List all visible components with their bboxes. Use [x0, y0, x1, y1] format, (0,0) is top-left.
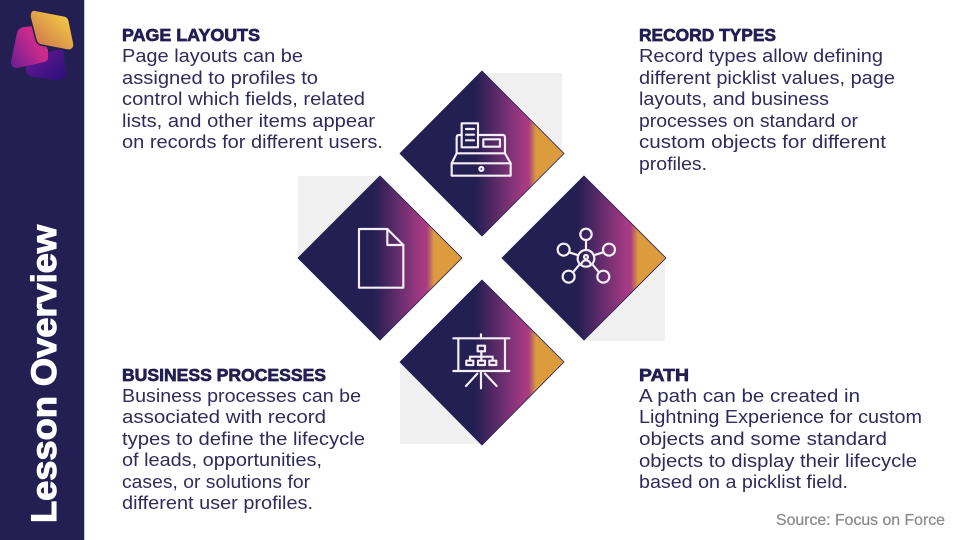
source note: Source: Focus on Force: [776, 512, 945, 529]
text block: path: objects to display their lifecycle: [639, 451, 917, 471]
text block: page layouts: on records for different users.: [122, 132, 383, 152]
text block: record types: Record types allow defining: [639, 46, 883, 66]
text block: record types: profiles.: [639, 154, 707, 174]
sidebar: [0, 0, 85, 540]
text block: page layouts: Page layouts can be: [122, 46, 303, 66]
text block: business processes: [122, 365, 365, 513]
text block: record types: custom objects for different: [639, 132, 886, 152]
text block: path: A path can be created in: [639, 386, 860, 406]
text block: business processes: different user profiles.: [122, 493, 313, 513]
diamond: page layouts: [400, 71, 564, 236]
text block: business processes: of leads, opportunities,: [122, 450, 322, 470]
diamond: document: [298, 176, 462, 340]
icon: presentation board: [453, 334, 509, 388]
text block: business processes: BUSINESS PROCESSES: [122, 365, 326, 385]
icon: cash register: [452, 123, 511, 176]
logo: [12, 10, 74, 79]
diamond: presentation: [400, 280, 564, 445]
sidebar title: Lesson Overview: [25, 224, 64, 523]
text block: page layouts: assigned to profiles to: [122, 68, 318, 88]
text block: business processes: associated with record: [122, 407, 326, 427]
text block: record types: [639, 25, 895, 174]
icon: document: [359, 229, 403, 288]
text block: page layouts: PAGE LAYOUTS: [122, 25, 260, 45]
text block: business processes: types to define the lifecycle: [122, 429, 365, 449]
gray backing squares: [298, 73, 665, 444]
text block: path: [639, 365, 922, 492]
text block: page layouts: lists, and other items appear: [122, 111, 375, 131]
text block: business processes: Business processes can be: [122, 386, 361, 406]
text block: path: objects and some standard: [639, 429, 887, 449]
text block: path: PATH: [639, 365, 689, 385]
text block: record types: layouts, and business: [639, 89, 829, 109]
text block: path: based on a picklist field.: [639, 472, 848, 492]
text block: record types: processes on standard or: [639, 111, 858, 131]
icon: network: [558, 229, 615, 283]
text block: path: Lightning Experience for custom: [639, 407, 922, 427]
text block: page layouts: control which fields, related: [122, 89, 365, 109]
diamond: record network: [502, 176, 666, 340]
text block: record types: RECORD TYPES: [639, 25, 776, 45]
text block: record types: different picklist values, page: [639, 68, 895, 88]
text block: page layouts: [122, 25, 383, 152]
text block: business processes: cases, or solutions for: [122, 472, 310, 492]
